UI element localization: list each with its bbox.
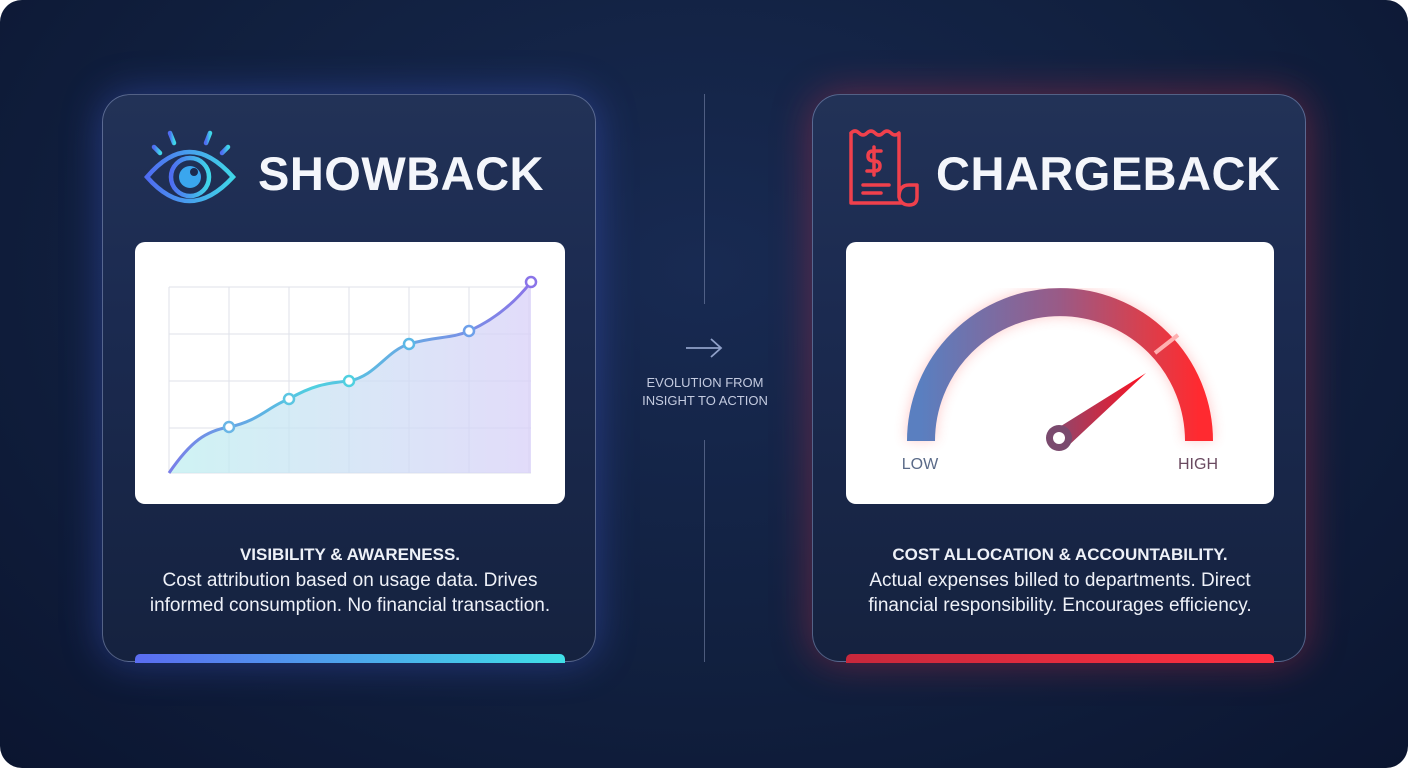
middle caption [642,375,768,408]
arrow [686,338,722,358]
gauge: LOW [902,456,939,473]
accent bar [135,654,565,663]
icon: receipt [849,129,919,207]
text: showback description: VISIBILITY & AWARENESS. [240,545,460,564]
middle caption: INSIGHT TO ACTION [642,393,768,408]
divider line [704,94,705,304]
accent bar [846,654,1274,663]
middle caption: EVOLUTION FROM [646,375,764,390]
text: showback description: Cost attribution based on usage data. Drives [163,570,537,591]
gauge [846,242,1274,504]
text: showback description [150,545,550,616]
text: chargeback description: COST ALLOCATION & ACCOUNTABILITY. [892,545,1228,564]
text: chargeback description [868,545,1252,616]
heading: SHOWBACK [258,147,544,200]
icon: eye [144,130,236,204]
text: chargeback description: Actual expenses billed to departments. Direct [869,570,1251,591]
panel: showback [102,94,596,662]
panel: chargeback [812,94,1306,662]
text: chargeback description: financial responsibility. Encourages efficiency. [868,595,1252,616]
gauge: HIGH [1178,456,1218,473]
text: showback description: informed consumption. No financial transaction. [150,595,550,616]
chart: rising line [135,242,565,504]
heading: CHARGEBACK [936,147,1280,200]
